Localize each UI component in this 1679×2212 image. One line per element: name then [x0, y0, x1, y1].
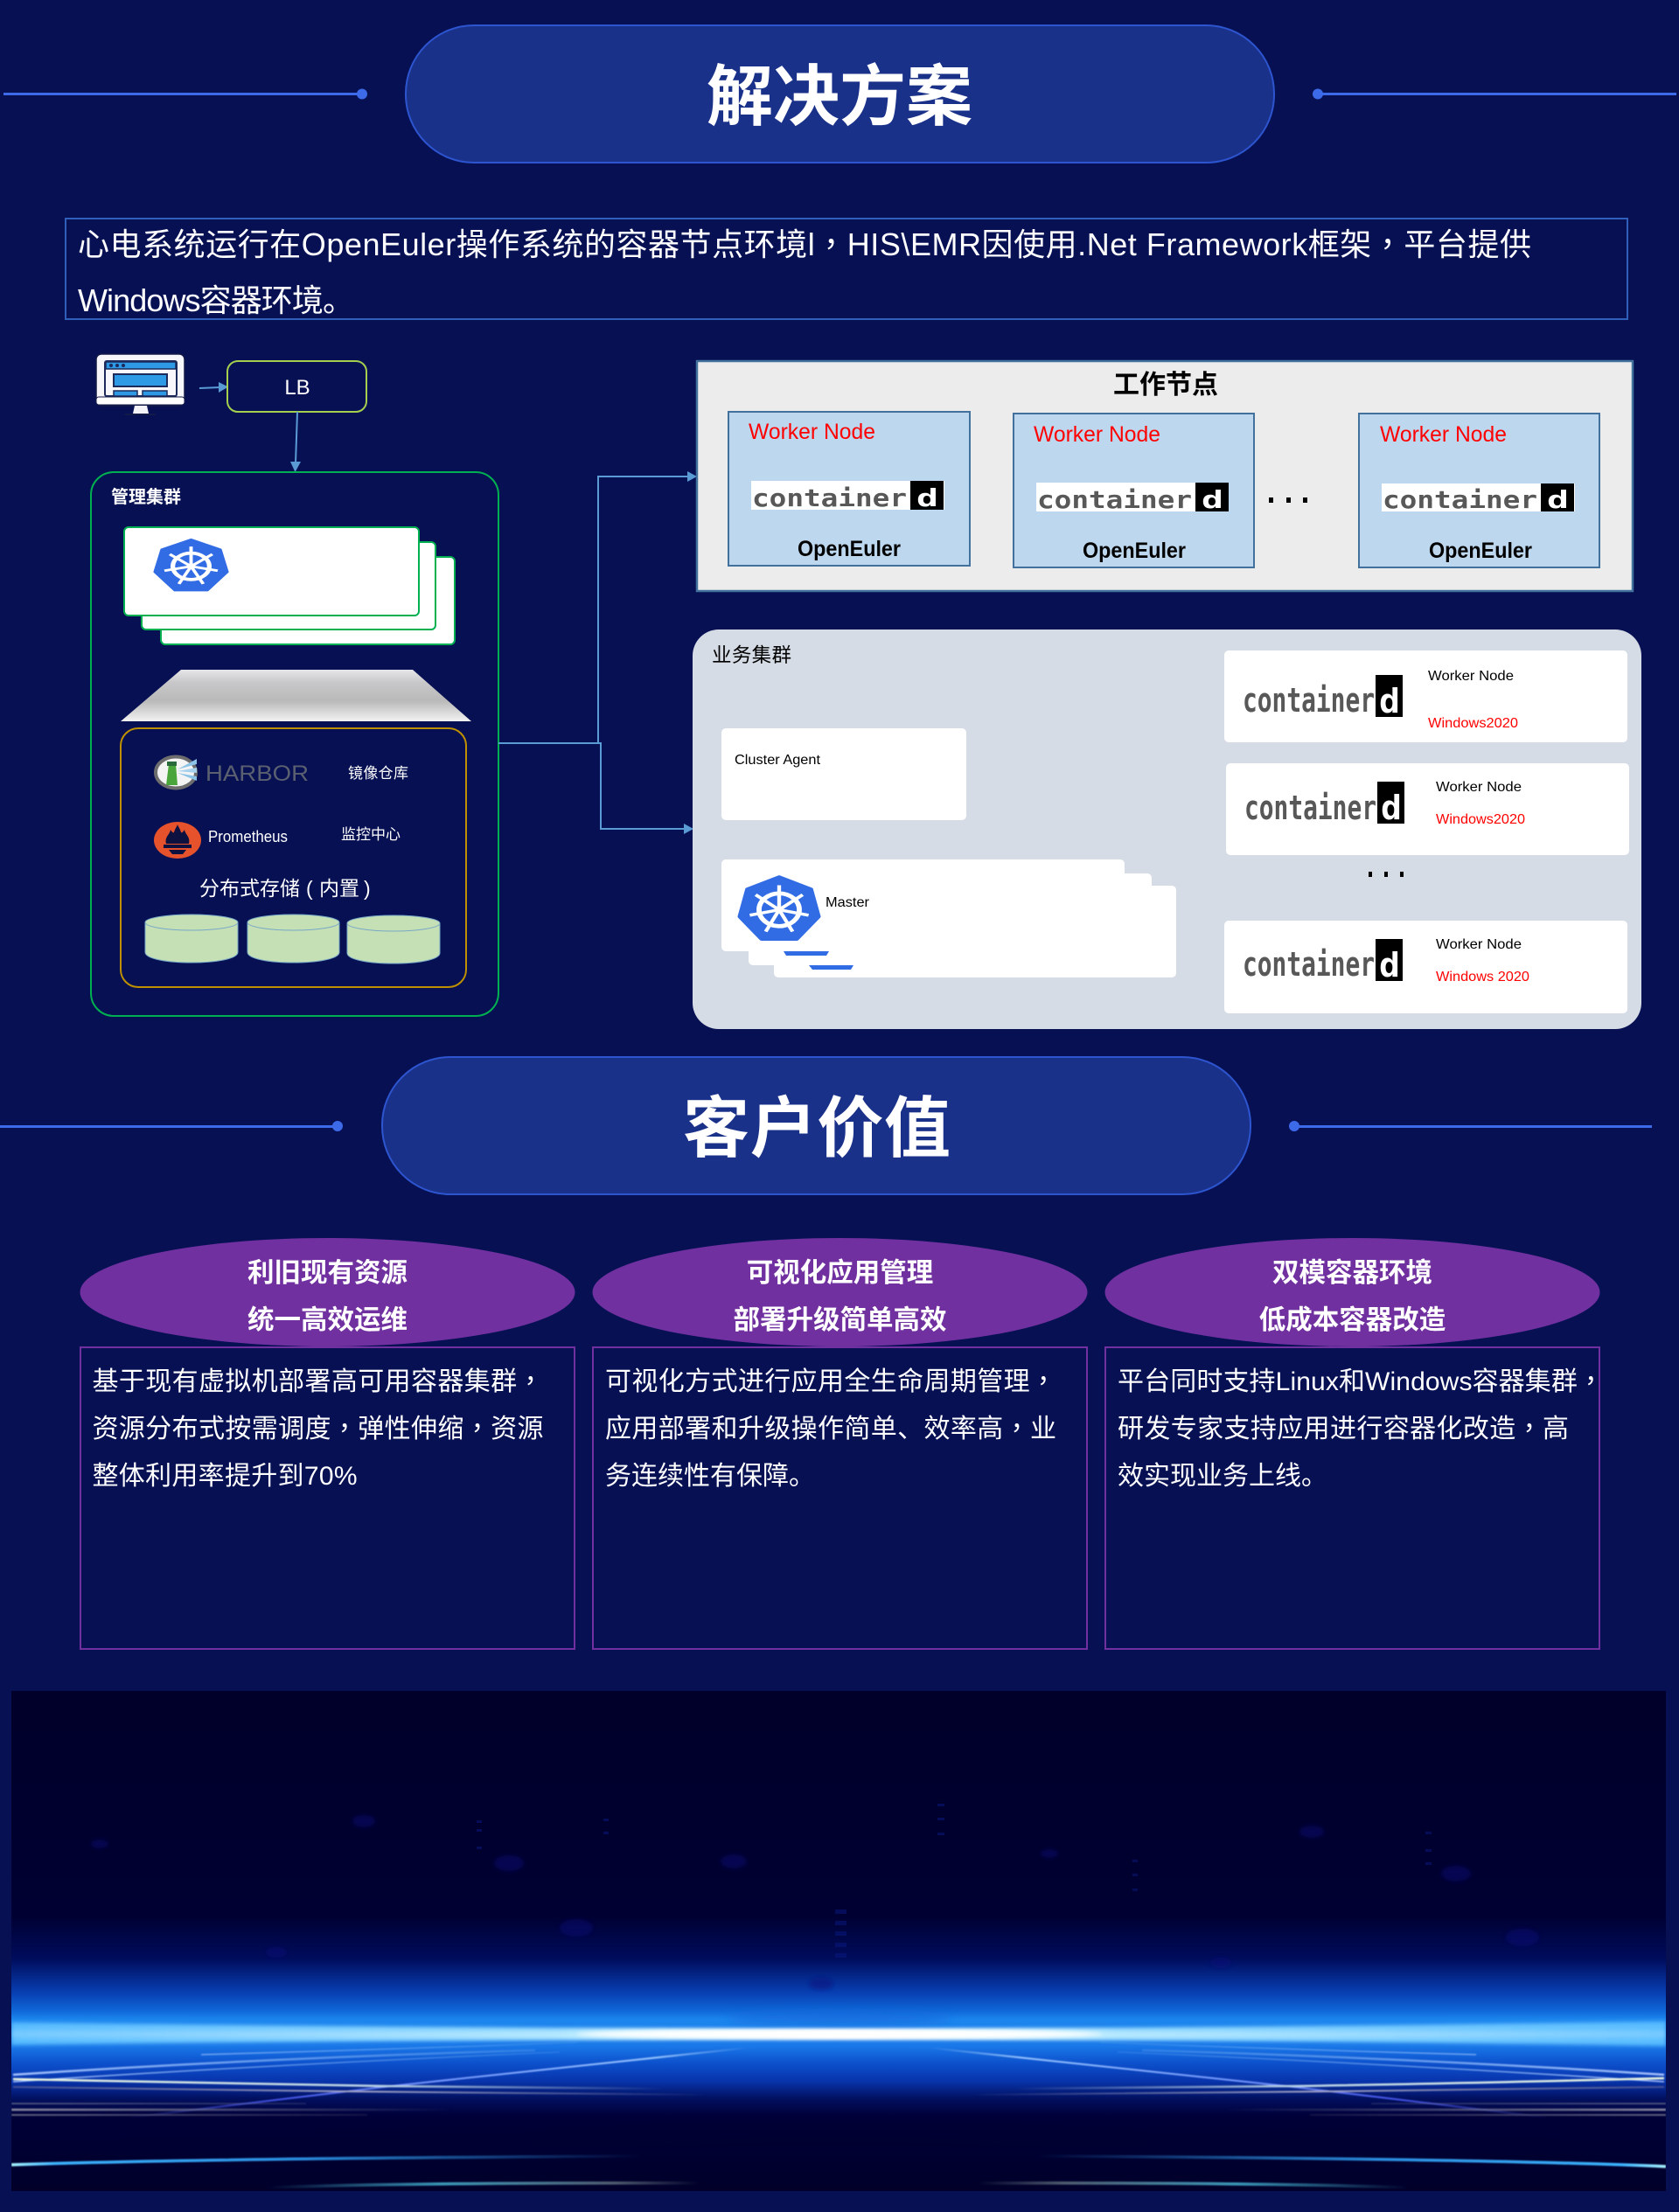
label: 分布式存储: ( [306, 877, 313, 900]
ellipsis [1369, 872, 1404, 877]
value heading ellipse: 部署升级简单高效 [733, 1305, 946, 1335]
icon: harbor [156, 757, 197, 789]
value text box: 可视化方式进行应用全生命周期管理， [605, 1360, 1056, 1398]
trapezoid connector [121, 670, 471, 721]
value column 3 [1105, 1238, 1604, 1649]
value heading ellipse [593, 1238, 1088, 1346]
heading: 管理集群: 管理集群 [111, 487, 181, 507]
worker node 1 [728, 412, 970, 566]
connector to business cluster [498, 743, 693, 834]
icon: computer [96, 354, 185, 415]
worker node 2: OpenEuler [1083, 539, 1186, 563]
value text box [593, 1347, 1087, 1649]
value heading ellipse [80, 1238, 575, 1346]
decorative tech horizon image [11, 1691, 1666, 2191]
right title connector [1289, 1121, 1652, 1131]
worker node 1: d [916, 483, 938, 512]
solution description box [66, 219, 1627, 319]
label: HARBOR logotype: HARBOR [206, 762, 309, 786]
worker node 2 [1014, 414, 1254, 567]
panel: management cluster [91, 472, 498, 1016]
windows worker card 3: Windows 2020 [1436, 970, 1529, 984]
value text box: 研发专家支持应用进行容器化改造，高 [1118, 1407, 1569, 1445]
title pill: 解决方案 [406, 25, 1274, 163]
cluster agent card: Cluster Agent [735, 753, 821, 768]
value heading ellipse [1105, 1238, 1600, 1346]
value column 2 [593, 1238, 1088, 1649]
heading: 业务集群: 业务集群 [712, 644, 791, 666]
storage cylinder 3 [347, 915, 440, 963]
worker node 3: d [1547, 485, 1569, 514]
label: 监控中心: 监控中心 [341, 826, 401, 843]
master stacked cards: Master [826, 895, 870, 910]
arrow: computer to LB [199, 382, 228, 393]
windows worker card 1 [1224, 650, 1627, 742]
panel: worker nodes [697, 361, 1633, 591]
worker node 2: container [1037, 485, 1192, 514]
LB box [227, 361, 366, 412]
title pill: 客户价值 [382, 1057, 1251, 1194]
value text box: 基于现有虚拟机部署高可用容器集群， [93, 1360, 544, 1398]
cluster agent card [721, 728, 966, 820]
value heading ellipse: 统一高效运维 [247, 1305, 408, 1335]
value text box: 平台同时支持Linux和Windows容器集群， [1118, 1360, 1604, 1398]
panel: business cluster [693, 630, 1641, 1029]
windows worker card 2: Windows2020 [1436, 812, 1525, 827]
stacked cards with kubernetes logo [124, 527, 455, 644]
label: 镜像仓库: 镜像仓库 [348, 765, 408, 782]
solution description box: Windows容器环境。 [78, 282, 354, 318]
value column 1 [80, 1238, 575, 1649]
windows worker card 3: Worker Node [1436, 937, 1522, 952]
value text box [80, 1347, 575, 1649]
title pill: 解决方案: 解决方案 [707, 60, 972, 135]
windows worker card 2: container [1244, 789, 1376, 827]
label: 分布式存储: ) [364, 877, 371, 900]
value heading ellipse: 可视化应用管理 [747, 1258, 933, 1288]
windows worker card 3: d [1379, 946, 1400, 984]
value heading ellipse: 低成本容器改造 [1259, 1305, 1446, 1335]
label: 分布式存储: 分布式存储 [199, 877, 300, 900]
windows worker card 3: container [1243, 945, 1375, 984]
windows worker card 1: Windows2020 [1428, 716, 1518, 731]
worker node 3: OpenEuler [1429, 539, 1532, 563]
value heading ellipse: 双模容器环境 [1272, 1258, 1432, 1288]
icon: prometheus [154, 822, 201, 859]
worker node 1: Worker Node [749, 420, 875, 444]
worker node 3 [1359, 414, 1599, 567]
ellipsis [1269, 497, 1307, 503]
arrow: LB to management cluster [290, 412, 301, 472]
worker node 1: OpenEuler [798, 537, 901, 561]
windows worker card 1: container [1243, 681, 1375, 720]
right title connector [1313, 89, 1676, 100]
left title connector [0, 1121, 343, 1131]
windows worker card 2 [1226, 763, 1629, 855]
LB box: LB [284, 376, 310, 400]
panel: platform services [121, 728, 466, 987]
worker node 2: d [1202, 485, 1223, 514]
value text box: 整体利用率提升到70% [93, 1462, 357, 1491]
worker node 1: container [752, 483, 907, 512]
storage cylinder 1 [145, 915, 238, 963]
label: Prometheus: Prometheus [208, 828, 288, 845]
worker node 3: Worker Node [1380, 422, 1507, 447]
value text box [1105, 1347, 1604, 1649]
windows worker card 3 [1224, 921, 1627, 1013]
storage cylinder 2 [247, 915, 339, 963]
windows worker card 1: d [1379, 682, 1400, 720]
value text box: 应用部署和升级操作简单、效率高，业 [605, 1407, 1056, 1445]
worker node 2: Worker Node [1034, 422, 1160, 447]
windows worker card 2: Worker Node [1436, 780, 1522, 795]
windows worker card 1: Worker Node [1428, 669, 1514, 684]
title pill: 客户价值: 客户价值 [683, 1092, 951, 1166]
worker node 3: container [1383, 485, 1537, 514]
label: 分布式存储: 内置 [319, 877, 359, 900]
value heading ellipse: 利旧现有资源 [247, 1258, 408, 1288]
value text box: 务连续性有保障。 [605, 1462, 815, 1491]
windows worker card 2: d [1381, 789, 1402, 827]
solution description box: 心电系统运行在OpenEuler操作系统的容器节点环境l，HIS\EMR因使用.Net Framework框架，平台提供 [78, 219, 1531, 265]
left title connector [3, 89, 367, 100]
connector to worker nodes [498, 471, 697, 743]
master stacked cards [721, 859, 1176, 977]
value text box: 效实现业务上线。 [1118, 1462, 1327, 1491]
heading: 工作节点: 工作节点 [1113, 371, 1218, 400]
value text box: 资源分布式按需调度，弹性伸缩，资源 [93, 1407, 544, 1445]
